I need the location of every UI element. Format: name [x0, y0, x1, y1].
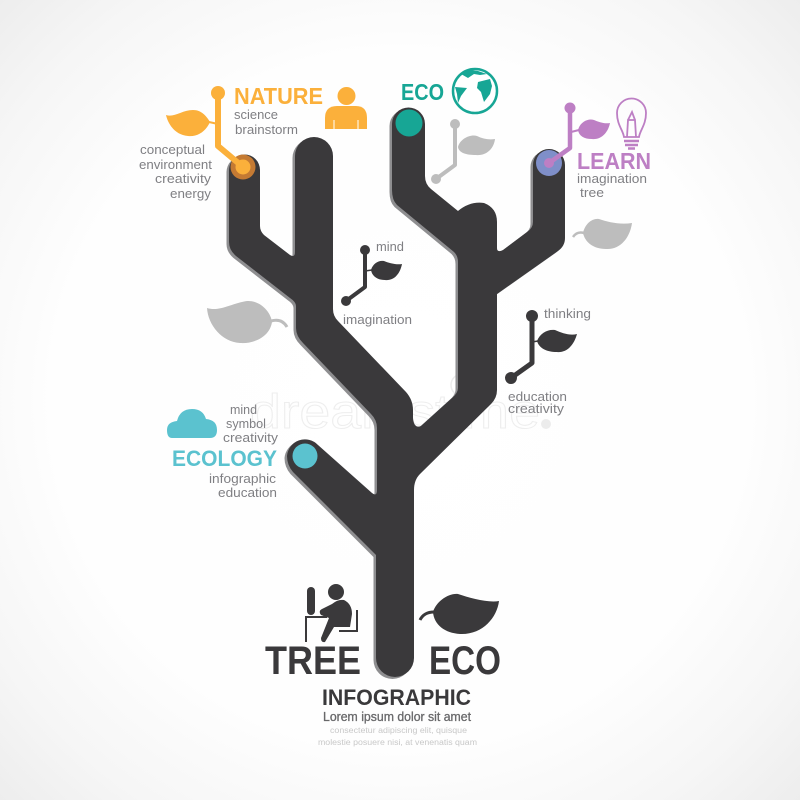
tree: [229, 108, 565, 677]
icon: globe: [453, 69, 497, 113]
ecology node: [292, 444, 318, 468]
icon: person at desk: [306, 584, 357, 642]
title: tree: TREE: [265, 639, 361, 683]
gray sprout: [431, 119, 495, 184]
thinking labels: [508, 306, 591, 416]
eco heading: ECO: [401, 79, 444, 105]
icon: light bulb: [617, 98, 646, 148]
watermark: dreamstime: [250, 386, 540, 439]
ecology text top: symbol: [226, 416, 266, 431]
ecology text top: [223, 402, 279, 445]
mind labels: [343, 239, 412, 327]
mind labels: mind: [376, 239, 404, 254]
ecology text bottom: infographic: [209, 471, 277, 486]
thinking labels: thinking: [544, 306, 591, 321]
eco node: [396, 110, 422, 136]
thinking labels: creativity: [508, 401, 565, 416]
mind sprout: [341, 245, 402, 306]
nature node and sprout: [166, 86, 256, 180]
ecology text top: mind: [230, 402, 257, 417]
watermark: [250, 374, 551, 439]
mind labels: imagination: [343, 312, 412, 327]
leaf: gray left: [207, 301, 287, 343]
nature text: science: [234, 107, 278, 122]
tagline: Lorem ipsum dolor sit amet: [323, 709, 471, 724]
learn text: tree: [580, 185, 604, 200]
nature text: brainstorm: [235, 122, 298, 137]
icon: big leaf: [420, 594, 499, 634]
ecology text bottom: education: [218, 485, 277, 500]
icon: cloud: [167, 409, 217, 438]
nature left text: energy: [170, 186, 212, 201]
nature heading: NATURE: [234, 83, 323, 109]
fine print: molestie posuere nisi, at venenatis quam: [318, 738, 477, 747]
nature left text: creativity: [155, 171, 212, 186]
title: eco: ECO: [429, 639, 501, 683]
ecology text bottom: [209, 471, 277, 500]
fine print: [318, 726, 477, 747]
thinking labels: education: [508, 389, 567, 404]
ecology text top: creativity: [223, 430, 279, 445]
learn text: [577, 171, 647, 200]
icon: person: [325, 87, 367, 129]
learn text: imagination: [577, 171, 647, 186]
nature left text: conceptual: [140, 142, 205, 157]
nature left text: [139, 142, 212, 201]
fine print: consectetur adipiscing elit, quisque: [330, 726, 468, 735]
nature text: [234, 107, 298, 137]
nature left text: environment: [139, 157, 212, 172]
ecology heading: ECOLOGY: [172, 446, 277, 471]
thinking sprout: [505, 310, 577, 384]
learn node and sprout: [536, 102, 610, 176]
subtitle: INFOGRAPHIC: [322, 685, 471, 710]
tree shadow edge: [226, 110, 562, 679]
learn heading: LEARN: [577, 148, 651, 174]
leaf: gray right: [573, 219, 632, 249]
